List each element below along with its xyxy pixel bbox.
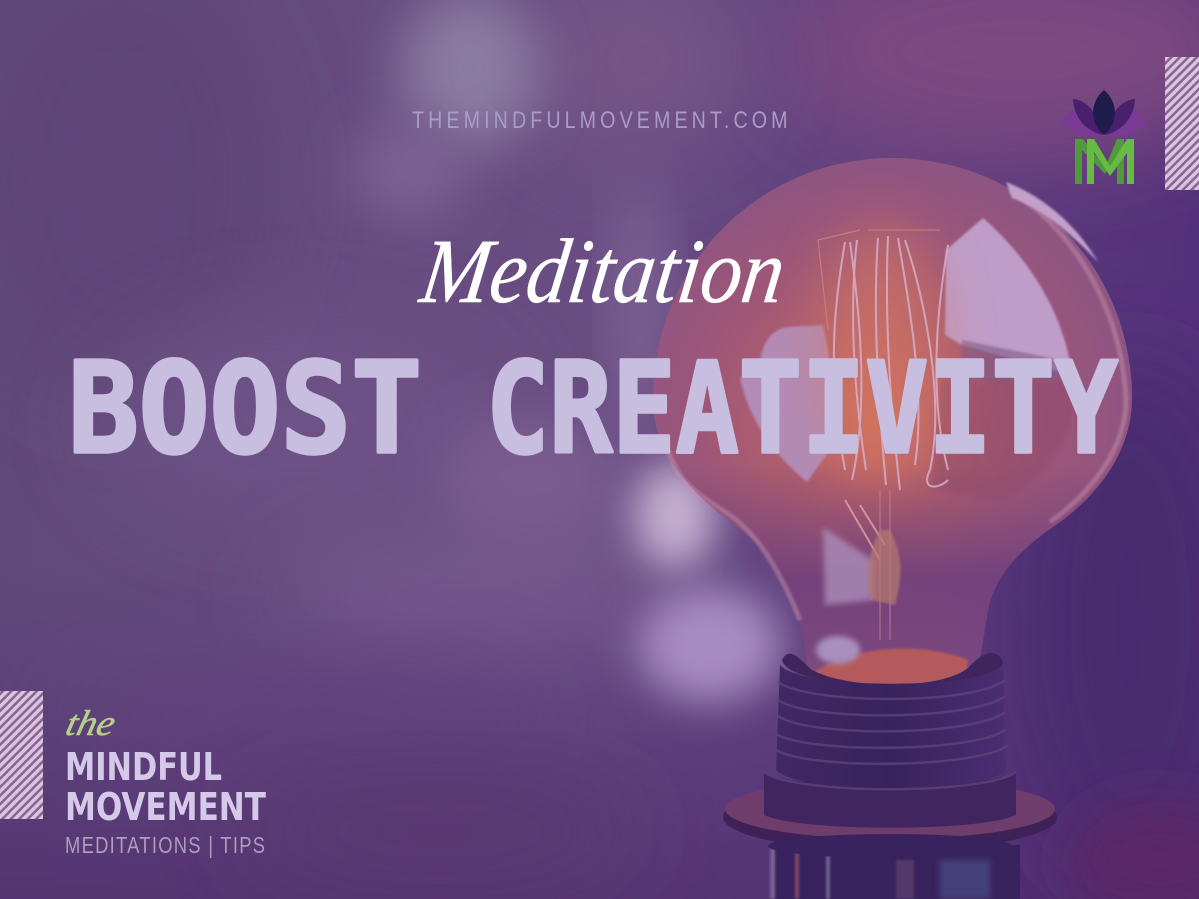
bulb glass xyxy=(653,158,1132,684)
script heading: Meditation: Meditation xyxy=(413,220,791,322)
neck fade xyxy=(653,158,1132,684)
stem reflections xyxy=(770,848,990,899)
brand: tagline: MEDITATIONS | TIPS xyxy=(65,833,265,859)
brand lockup xyxy=(62,703,267,859)
filament base xyxy=(868,530,900,605)
monogram: light green M xyxy=(1087,139,1134,184)
website url: THEMINDFULMOVEMENT.COM xyxy=(412,106,788,133)
filament glow xyxy=(818,220,942,480)
title word: boost: BOOST xyxy=(68,335,422,482)
reflection: window right xyxy=(945,218,1070,372)
socket top ring xyxy=(782,653,1003,685)
socket thread ridges xyxy=(764,680,1016,789)
lotus outer petals xyxy=(1062,108,1146,136)
lotus centre petal xyxy=(1093,90,1115,135)
stripe block: bottom left xyxy=(0,691,43,819)
stripe block: top right xyxy=(1165,57,1199,190)
brand: the: the xyxy=(62,703,120,743)
socket collar xyxy=(764,772,1016,828)
illustration: light bulb xyxy=(653,158,1132,899)
filament wires xyxy=(818,230,948,640)
socket stem xyxy=(770,845,1020,899)
brand: movement: MOVEMENT xyxy=(65,785,267,829)
reflection: top edge glare xyxy=(1006,182,1098,262)
socket thread xyxy=(776,665,1006,789)
socket flange xyxy=(723,783,1057,851)
glowing glass bottom xyxy=(815,649,968,684)
reflection: window left xyxy=(740,325,835,482)
brand: mindful: MINDFUL xyxy=(65,745,222,789)
logo: lotus and MM monogram xyxy=(1062,90,1146,184)
reflection: lower glass xyxy=(823,527,873,605)
lotus side petals xyxy=(1073,99,1135,135)
glass rim highlight xyxy=(668,190,1126,620)
reflection: skyline band xyxy=(960,340,1074,382)
main title xyxy=(68,335,1118,482)
monogram: dark green M xyxy=(1075,139,1124,184)
